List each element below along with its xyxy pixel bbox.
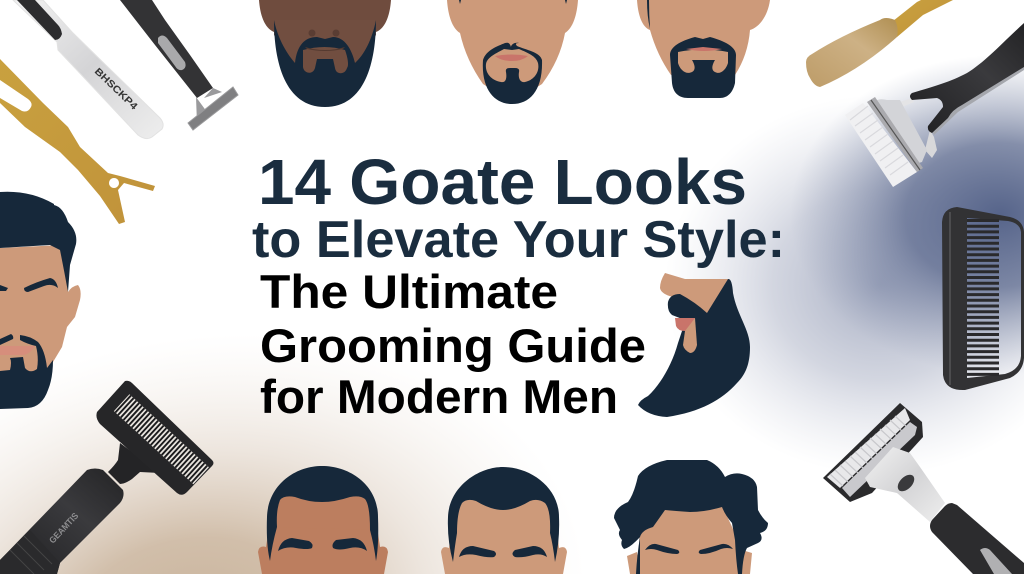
mouth (0, 346, 35, 355)
title line 1: 14 Goate Looks (258, 146, 747, 218)
eyebrows (0, 278, 58, 292)
face: short-haired light face (bottom centre) (441, 467, 567, 574)
icon: silver spatula tool (13, 0, 163, 139)
subtitle line 3: for Modern Men (260, 370, 618, 423)
icon: black comb (942, 207, 1024, 390)
icon: profile with beard (638, 273, 750, 417)
face: light face with box goatee (top right) (637, 0, 770, 98)
face: short-haired tan face (bottom left) (258, 466, 388, 574)
face: curly-haired light face (bottom right) (614, 460, 768, 574)
subtitle line 2: Grooming Guide (260, 319, 646, 372)
hair (267, 466, 378, 561)
subtitle line 1: The Ultimate (260, 265, 558, 318)
icon: silver and black razor (823, 403, 1024, 574)
hair (448, 467, 559, 562)
icon: gold-handled brush (806, 0, 953, 87)
title line 2: to Elevate Your Style: (252, 211, 785, 269)
icon: black beard clipper: GEAMTIS (47, 511, 80, 545)
icon: silver spatula tool: BHSCKP4 (92, 66, 139, 113)
eyebrows (459, 546, 547, 557)
face: brown face with full goatee (top left) (259, 0, 391, 107)
goatee (0, 334, 53, 409)
eyebrows (645, 544, 733, 554)
eyebrows (278, 538, 367, 551)
icon: black safety razor (120, 0, 238, 130)
icon: gold fork clip (0, 59, 155, 224)
hair (614, 460, 768, 574)
hair (0, 192, 76, 292)
face: light face with thin goatee (top centre) (447, 0, 578, 104)
icon: black-handled comb razor (845, 23, 1024, 187)
title (252, 146, 785, 423)
face: face with anchor goatee (left) (0, 192, 81, 409)
icon: black beard clipper (0, 381, 214, 574)
